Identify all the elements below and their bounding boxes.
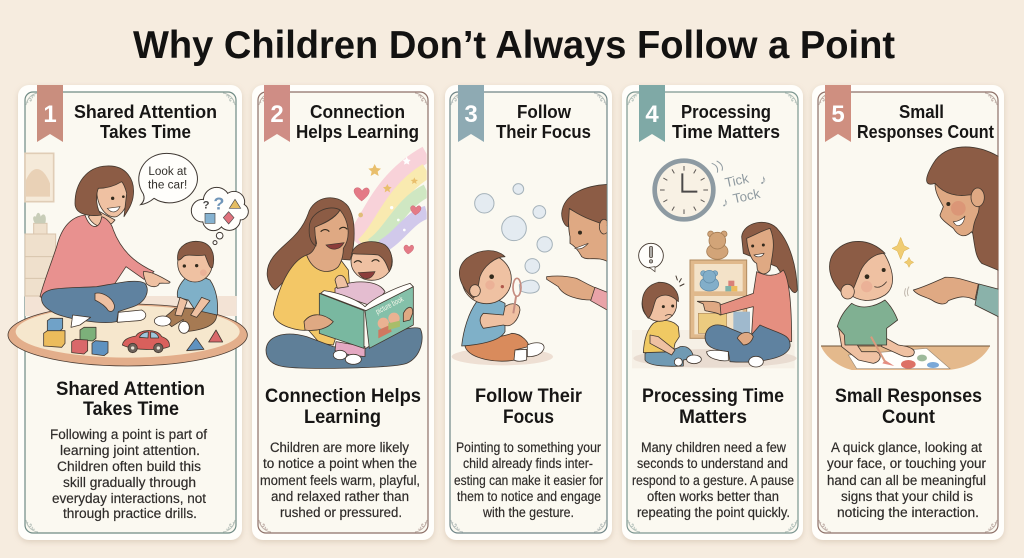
subheading: Matters bbox=[679, 407, 747, 428]
ribbon number 4 bbox=[639, 85, 665, 142]
subheading bbox=[642, 386, 784, 428]
mother bbox=[266, 198, 422, 368]
mother bbox=[40, 166, 170, 327]
heading: Responses Count bbox=[857, 121, 994, 142]
body text: Children are more likely bbox=[270, 440, 409, 455]
body text: Following a point is part of bbox=[50, 427, 207, 442]
ribbon number 5: 5 bbox=[831, 101, 845, 128]
ribbon number 4: 4 bbox=[645, 101, 659, 128]
subheading: Count bbox=[882, 407, 936, 428]
ribbon number 5 bbox=[825, 85, 851, 142]
tick tock text: ♪ bbox=[760, 172, 767, 187]
subheading bbox=[56, 379, 205, 420]
ribbon number 1: 1 bbox=[43, 101, 57, 128]
subheading bbox=[475, 386, 583, 428]
bubbles bbox=[475, 184, 552, 293]
body text: Pointing to something your bbox=[456, 440, 601, 455]
sparkles bbox=[892, 237, 914, 267]
body text: seconds to understand and bbox=[637, 456, 788, 471]
panel: follow their focus bbox=[445, 85, 612, 540]
mother sitting and pointing bbox=[697, 222, 797, 367]
body text: rushed or pressured. bbox=[280, 505, 402, 520]
body text bbox=[50, 427, 207, 521]
body text: moment feels warm, playful, bbox=[260, 473, 420, 488]
body text: A quick glance, looking at bbox=[831, 440, 982, 455]
child bbox=[154, 241, 218, 333]
subheading: Follow Their bbox=[475, 386, 583, 407]
body text: child already finds inter- bbox=[463, 456, 593, 471]
exclamation bubble bbox=[639, 243, 663, 272]
speech bubble: the car! bbox=[148, 177, 187, 191]
picture book: picture book bbox=[374, 294, 405, 316]
shadow bbox=[452, 348, 553, 365]
panel: small responses count bbox=[812, 85, 1004, 540]
picture book bbox=[304, 283, 413, 348]
speech bubble bbox=[139, 153, 197, 205]
heading bbox=[857, 101, 994, 142]
heading: Follow bbox=[517, 101, 572, 122]
body text: to notice a point when the bbox=[263, 456, 417, 471]
body text: repeating the point quickly. bbox=[637, 505, 790, 520]
subheading bbox=[835, 386, 982, 428]
body text: signs that your child is bbox=[841, 489, 973, 504]
body text: hand can all be meaningful bbox=[827, 473, 986, 488]
heading bbox=[496, 101, 591, 142]
panel: shared attention takes time bbox=[8, 85, 248, 540]
body text bbox=[632, 440, 794, 520]
heading: Helps Learning bbox=[296, 121, 419, 142]
tick tock text bbox=[712, 161, 767, 210]
ribbon number 2: 2 bbox=[270, 101, 284, 128]
toy triangles bbox=[187, 330, 223, 351]
wall art and dresser bbox=[25, 153, 237, 316]
subheading: Processing Time bbox=[642, 386, 784, 407]
subheading: Connection Helps bbox=[265, 386, 421, 407]
bookshelf bbox=[690, 260, 750, 338]
panel: processing time matters bbox=[622, 85, 803, 540]
round rug bbox=[8, 304, 247, 366]
body text: Children often build this bbox=[57, 459, 201, 474]
mother pointing bbox=[547, 184, 610, 312]
body text: everyday interactions, not bbox=[52, 491, 206, 506]
heading: Their Focus bbox=[496, 121, 591, 142]
illustration: mother pointing at the car for child on rug bbox=[8, 153, 248, 366]
body text: Many children need a few bbox=[641, 440, 786, 455]
heading: Takes Time bbox=[100, 121, 191, 142]
child bbox=[830, 241, 914, 363]
teddy bear on shelf bbox=[707, 231, 728, 259]
heading bbox=[672, 101, 780, 142]
toy car bbox=[122, 331, 169, 353]
body text: often works better than bbox=[647, 489, 779, 504]
alert marks bbox=[676, 276, 684, 286]
body text: respond to a gesture. A pause bbox=[632, 473, 794, 488]
thought cloud with shapes: ? bbox=[203, 199, 210, 211]
subheading: Takes Time bbox=[83, 399, 179, 420]
hearts bbox=[354, 188, 421, 254]
toy blocks bbox=[44, 318, 108, 356]
body text: learning joint attention. bbox=[60, 443, 200, 458]
body text: them to notice and engage bbox=[457, 489, 601, 504]
child with bubble wand bbox=[459, 251, 544, 361]
clock bbox=[655, 161, 713, 219]
thought cloud with shapes bbox=[191, 187, 248, 245]
shadow bbox=[633, 349, 797, 368]
heading: Processing bbox=[681, 101, 771, 122]
heading bbox=[74, 101, 217, 142]
subheading: Shared Attention bbox=[56, 379, 205, 400]
motion lines bbox=[905, 287, 909, 297]
ribbon number 2 bbox=[264, 85, 290, 142]
ribbon number 3: 3 bbox=[464, 101, 478, 128]
stars bbox=[358, 157, 418, 231]
ribbon number 1 bbox=[37, 85, 63, 142]
heading bbox=[296, 101, 419, 142]
floor bbox=[632, 330, 795, 368]
illustration: mother and child laughing over a picture book bbox=[266, 154, 427, 368]
thought cloud with shapes: ? bbox=[213, 193, 224, 213]
mother bbox=[913, 147, 1002, 318]
body text bbox=[827, 440, 987, 520]
heading: Small bbox=[899, 101, 944, 122]
ribbon number 3 bbox=[458, 85, 484, 142]
illustration: child blowing bubbles, mother pointing bbox=[452, 184, 610, 365]
heading: Shared Attention bbox=[74, 101, 217, 122]
body text: your face, or touching your bbox=[827, 456, 987, 471]
title: Why Children Don’t Always Follow a Point bbox=[133, 24, 895, 67]
child sitting bbox=[642, 282, 701, 366]
body text: and relaxed rather than bbox=[271, 489, 409, 504]
body text: skill gradually through bbox=[63, 475, 196, 490]
rainbow bbox=[353, 154, 427, 247]
body text: esting can make it easier for bbox=[454, 473, 603, 488]
tick tock text: Tick bbox=[724, 171, 750, 190]
blue teddy and blocks bbox=[700, 270, 737, 291]
subheading: Focus bbox=[503, 407, 554, 428]
illustration: child drawing looks up as mother points bbox=[821, 147, 1002, 370]
heading: Connection bbox=[310, 101, 405, 122]
speech bubble: Look at bbox=[148, 164, 187, 178]
body text bbox=[260, 440, 420, 520]
body text: noticing the interaction. bbox=[837, 505, 979, 520]
tick tock text: ♪ bbox=[722, 196, 728, 210]
body text: through practice drills. bbox=[63, 506, 197, 521]
subheading: Learning bbox=[304, 407, 381, 428]
subheading bbox=[265, 386, 421, 428]
heading: Time Matters bbox=[672, 121, 780, 142]
tick tock text: Tock bbox=[732, 186, 762, 206]
subheading: Small Responses bbox=[835, 386, 982, 407]
panel: connection helps learning bbox=[252, 85, 434, 540]
illustration: mother waits while child processes, clock ticking bbox=[632, 161, 797, 368]
body text: with the gesture. bbox=[482, 505, 574, 520]
child bbox=[333, 242, 392, 364]
table with paper and paints bbox=[821, 346, 990, 370]
body text bbox=[454, 440, 603, 520]
